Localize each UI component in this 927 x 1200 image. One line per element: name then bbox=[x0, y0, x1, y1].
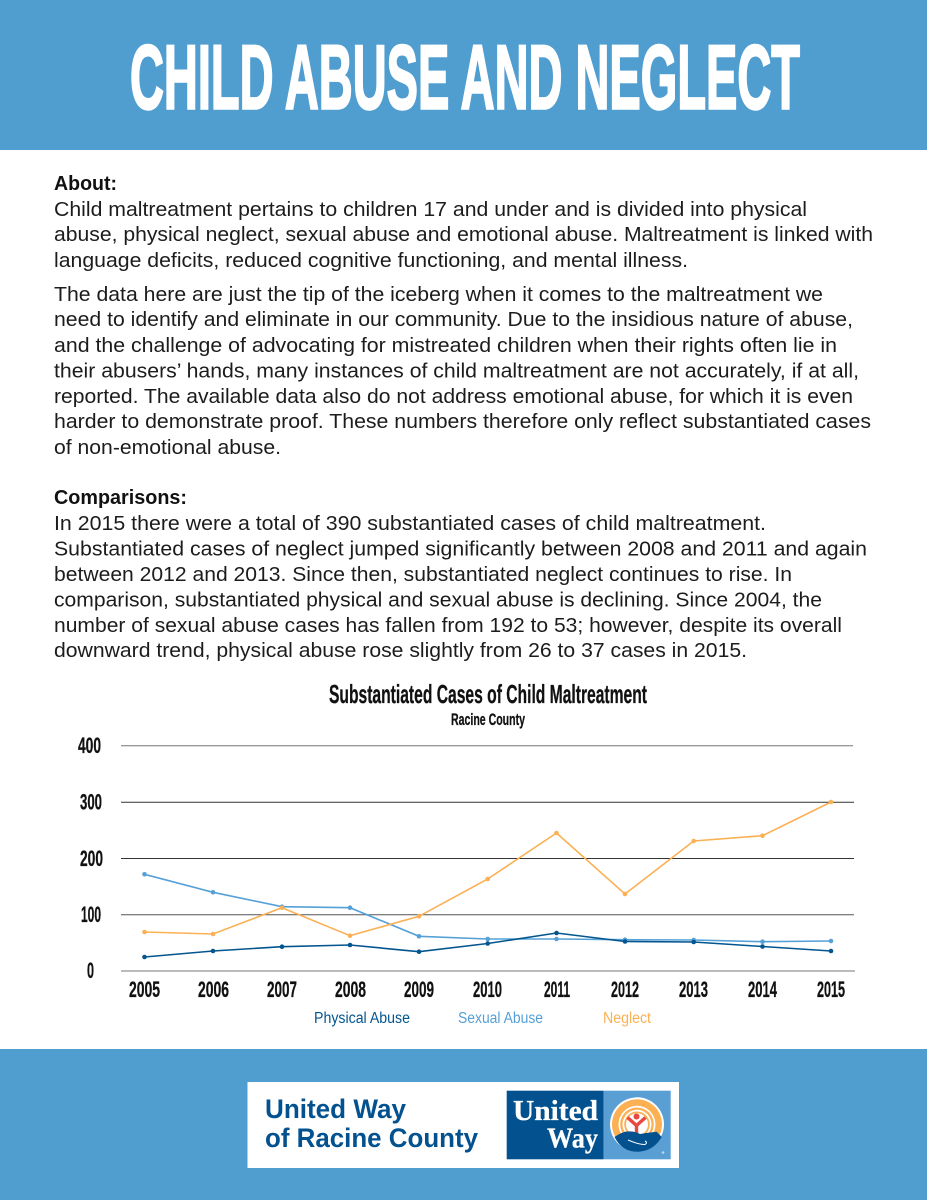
legend: Physical Abuse bbox=[314, 1010, 410, 1027]
text block: about paragraph 1: language deficits, reduced cognitive functioning, and mental illness. bbox=[54, 249, 688, 272]
x axis labels: 2012 bbox=[611, 977, 639, 1002]
panel: about bbox=[54, 172, 873, 459]
legend: Neglect bbox=[603, 1010, 652, 1027]
text block: about paragraph 2 bbox=[54, 283, 871, 459]
x axis labels: 2007 bbox=[267, 977, 297, 1002]
footer band bbox=[0, 1049, 927, 1200]
series: sexual abuse bbox=[142, 872, 833, 944]
text block: about paragraph 2: harder to demonstrate proof. These numbers therefore only reflect substantiated cases bbox=[54, 410, 871, 433]
logo card bbox=[248, 1082, 679, 1168]
grid lines bbox=[121, 746, 855, 971]
legend: Sexual Abuse bbox=[458, 1010, 543, 1027]
text block: comparisons paragraph: In 2015 there were a total of 390 substantiated cases of child maltreatment. bbox=[54, 512, 766, 535]
text block: about paragraph 1 bbox=[54, 198, 873, 272]
y axis labels: 300 bbox=[80, 790, 102, 814]
text block: comparisons paragraph bbox=[54, 512, 867, 662]
panel: comparisons bbox=[54, 486, 867, 662]
icon: United Way logo bbox=[507, 1091, 671, 1159]
text block: about paragraph 2: reported. The available data also do not address emotional abuse, for which it is even bbox=[54, 385, 853, 408]
x axis labels: 2013 bbox=[679, 977, 708, 1002]
icon: United Way logo: Way bbox=[547, 1122, 598, 1154]
organisation name: of Racine County bbox=[265, 1123, 478, 1153]
organisation name bbox=[265, 1094, 478, 1153]
text block: comparisons paragraph: downward trend, physical abuse rose slightly from 26 to 37 cases in 2015. bbox=[54, 639, 747, 662]
x axis labels: 2009 bbox=[404, 977, 434, 1002]
header band bbox=[0, 0, 927, 150]
text block: about paragraph 2: of non-emotional abuse. bbox=[54, 436, 281, 459]
text block: comparisons paragraph: between 2012 and 2013. Since then, substantiated neglect continues to rise. In bbox=[54, 563, 792, 586]
text block: about paragraph 1: Child maltreatment pertains to children 17 and under and is divided into physical bbox=[54, 198, 807, 221]
text block: about paragraph 1: abuse, physical neglect, sexual abuse and emotional abuse. Maltreatment is linked with bbox=[54, 223, 873, 246]
x axis labels: 2014 bbox=[748, 977, 777, 1002]
y axis labels: 100 bbox=[81, 902, 101, 927]
x axis labels: 2015 bbox=[817, 977, 845, 1002]
legend bbox=[314, 1010, 652, 1027]
x axis labels bbox=[129, 977, 845, 1002]
series: neglect bbox=[142, 800, 833, 938]
heading: comparisons: Comparisons: bbox=[54, 486, 187, 509]
y axis labels: 0 bbox=[87, 958, 94, 983]
x axis labels: 2006 bbox=[198, 977, 229, 1002]
text block: comparisons paragraph: comparison, substantiated physical and sexual abuse is declining. Since 2004, the bbox=[54, 588, 822, 612]
icon: United Way logo: United bbox=[513, 1095, 598, 1127]
chart subtitle: Racine County bbox=[451, 711, 526, 729]
text block: about paragraph 2: and the challenge of advocating for mistreated children when their rights often lie in bbox=[54, 334, 837, 357]
y axis labels: 200 bbox=[80, 846, 103, 871]
line chart: substantiated cases of child maltreatment bbox=[78, 679, 855, 1027]
series: physical abuse bbox=[142, 931, 833, 959]
chart title: Substantiated Cases of Child Maltreatment bbox=[329, 679, 647, 709]
text block: about paragraph 2: need to identify and eliminate in our community. Due to the insidious nature of abuse, bbox=[54, 308, 853, 331]
text block: comparisons paragraph: number of sexual abuse cases has fallen from 192 to 53; however, despite its overall bbox=[54, 614, 842, 637]
text block: comparisons paragraph: Substantiated cases of neglect jumped significantly between 2008 and 2011 and again bbox=[54, 538, 867, 560]
x axis labels: 2005 bbox=[129, 977, 160, 1002]
x axis labels: 2008 bbox=[335, 977, 366, 1002]
x axis labels: 2010 bbox=[473, 977, 502, 1002]
y axis labels bbox=[78, 733, 103, 983]
organisation name: United Way bbox=[265, 1094, 406, 1124]
y axis labels: 400 bbox=[78, 733, 101, 758]
text block: about paragraph 2: their abusers’ hands, many instances of child maltreatment are not accurately, if at all, bbox=[54, 360, 859, 382]
heading: about: About: bbox=[54, 172, 117, 195]
x axis labels: 2011 bbox=[544, 977, 570, 1002]
text block: about paragraph 2: The data here are just the tip of the iceberg when it comes to the maltreatment we bbox=[54, 283, 823, 306]
